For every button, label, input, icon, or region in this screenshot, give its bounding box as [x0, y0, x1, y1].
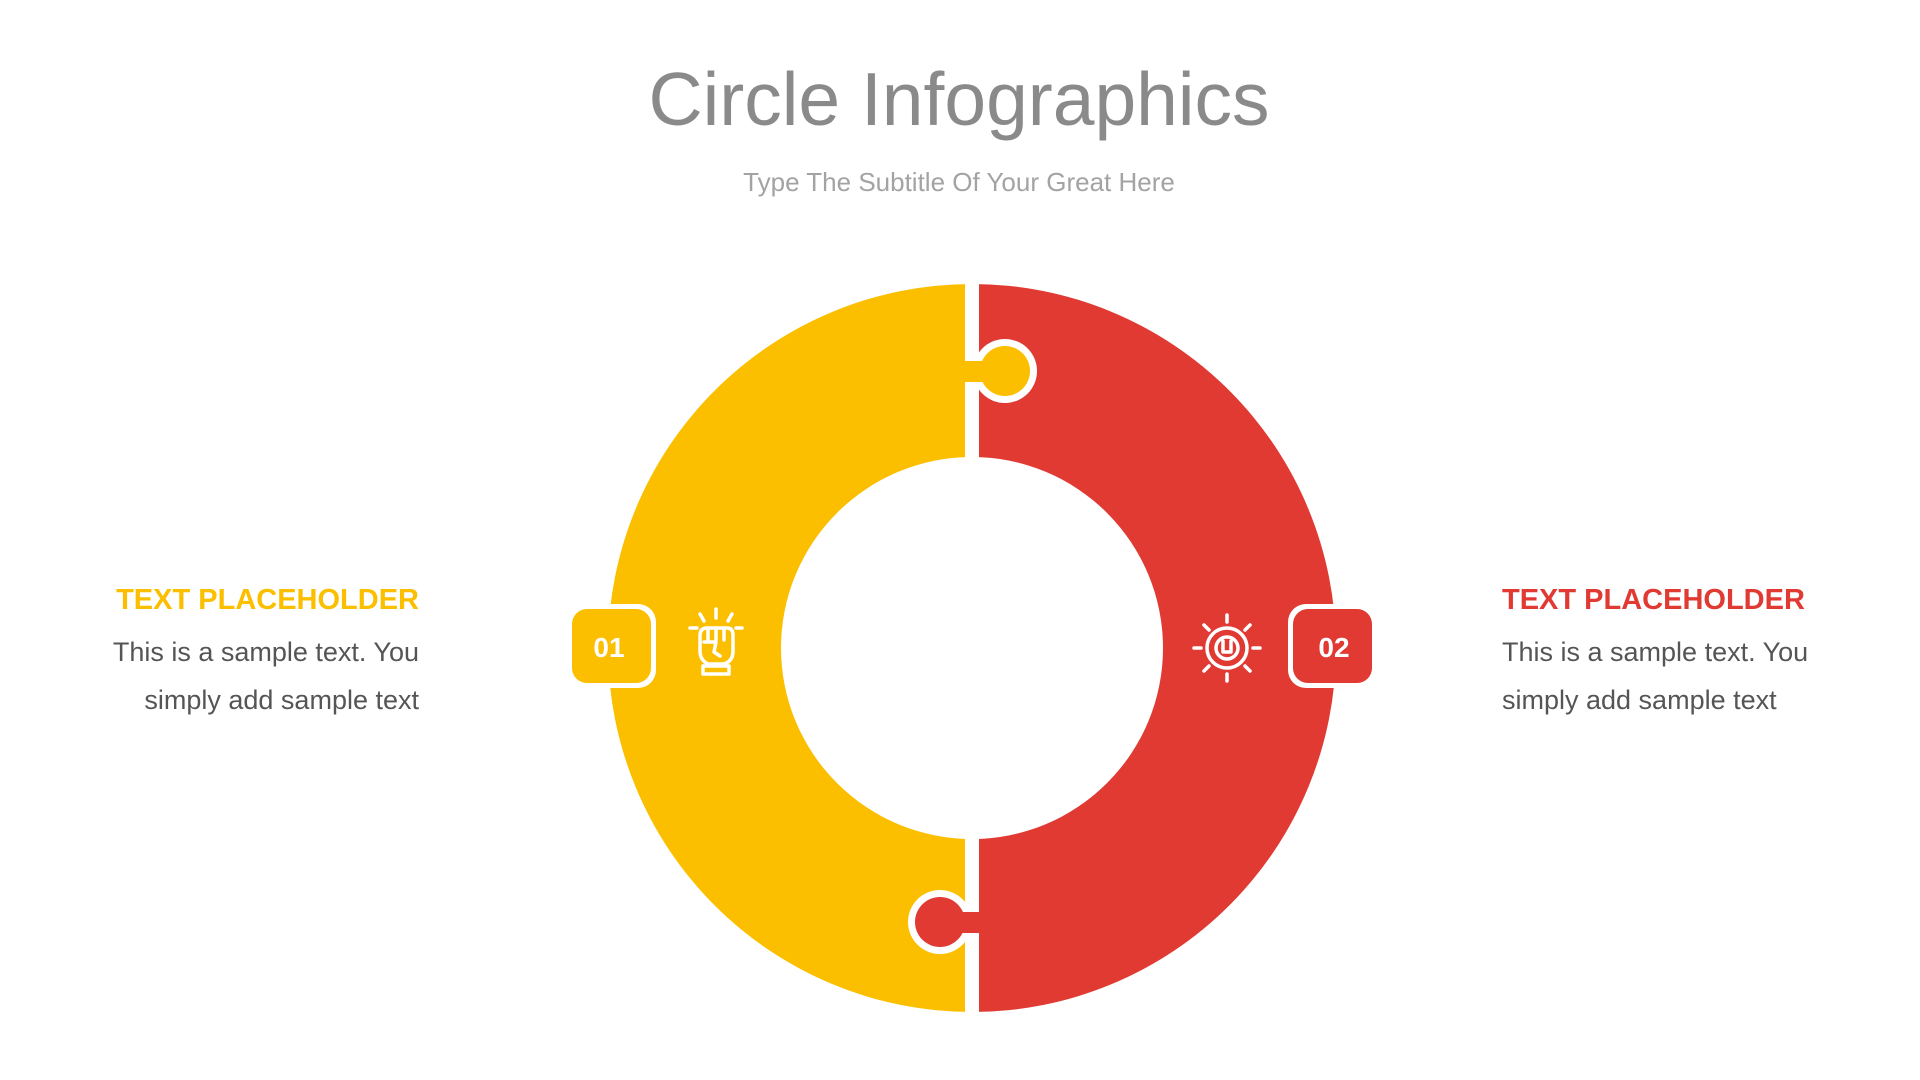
badge 01: 01: [593, 632, 625, 663]
right body: [1502, 637, 1808, 715]
left body: simply add sample text: [144, 685, 419, 715]
right heading: TEXT PLACEHOLDER: [1502, 584, 1805, 616]
left body: [113, 637, 419, 715]
badge 02: 02: [1318, 632, 1350, 663]
subtitle: Type The Subtitle Of Your Great Here: [743, 167, 1175, 197]
puzzle knob top: [950, 339, 1037, 403]
puzzle knob bottom: [908, 890, 994, 954]
right text block: [1502, 584, 1808, 715]
badge 02: [1288, 604, 1376, 688]
title: Circle Infographics: [648, 57, 1270, 141]
right body: simply add sample text: [1502, 685, 1777, 715]
left heading: TEXT PLACEHOLDER: [116, 584, 419, 616]
left body: This is a sample text. You: [113, 637, 419, 667]
segment: red right: [972, 284, 1336, 1012]
right body: This is a sample text. You: [1502, 637, 1808, 667]
left text block: [113, 584, 419, 715]
badge 01: [568, 604, 656, 688]
segment: yellow left: [608, 284, 972, 1012]
icon: gear: [1194, 615, 1260, 681]
icon: fist: [690, 609, 742, 674]
